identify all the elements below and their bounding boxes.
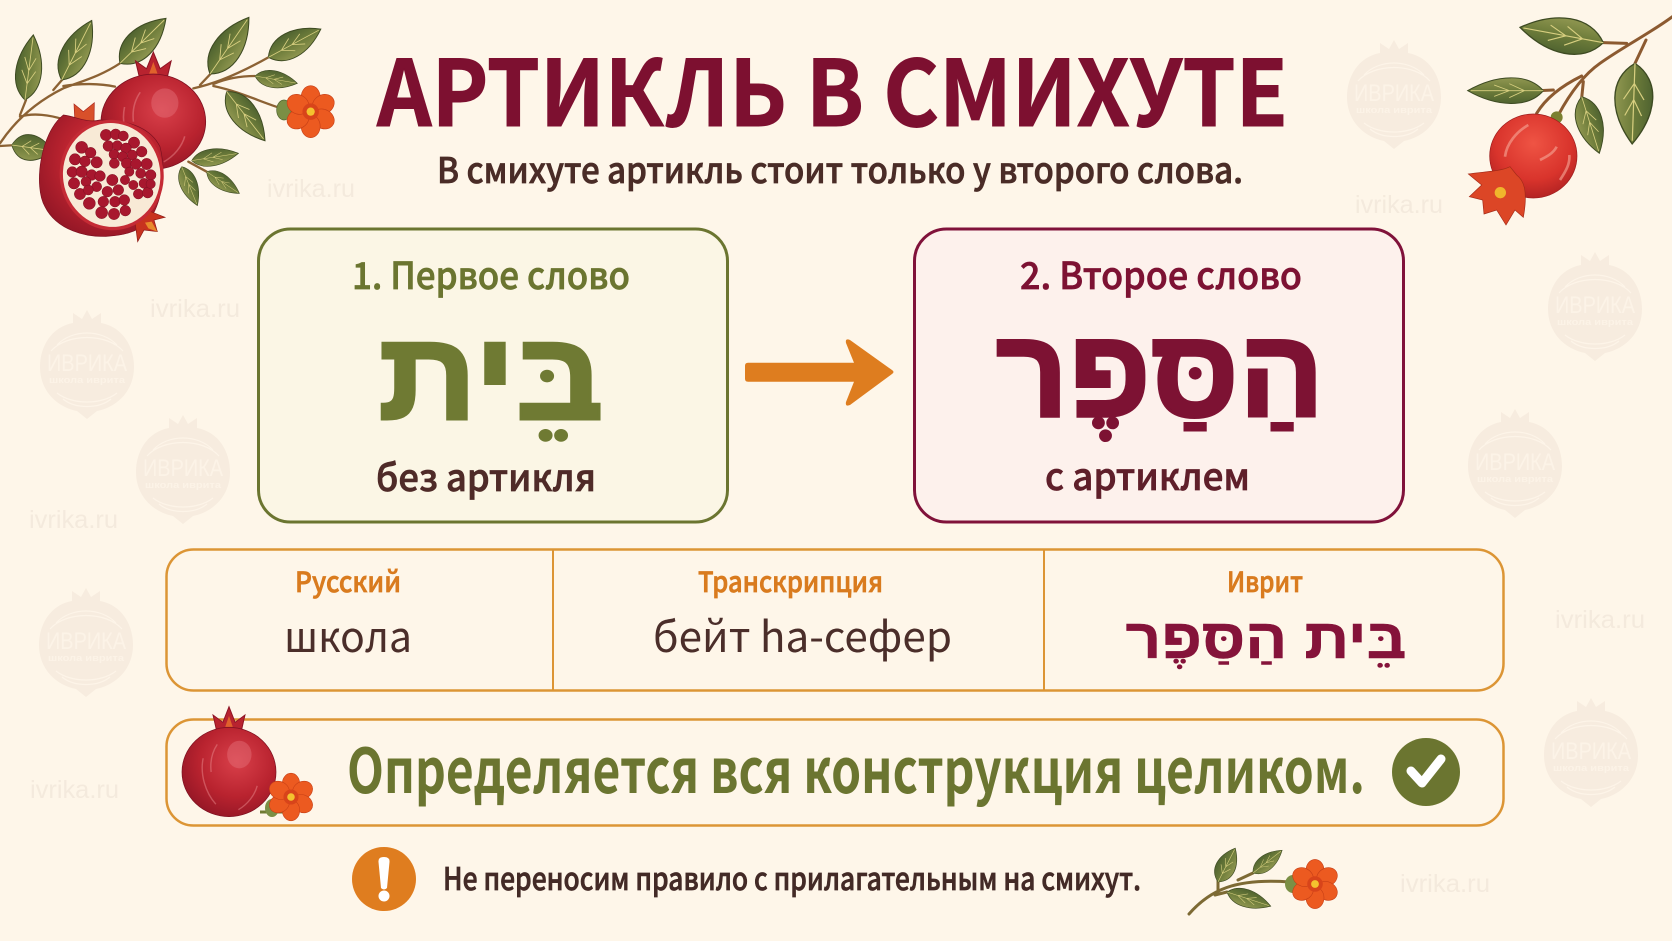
watermark emblem 4: школа иврита — [1356, 105, 1433, 115]
whole pomegranate — [101, 52, 206, 169]
cut pomegranate — [39, 103, 171, 242]
column: Hebrew: Иврит — [1227, 561, 1303, 601]
watermark emblem 2 — [136, 415, 230, 524]
first word heading: 1. Первое слово — [352, 246, 630, 300]
watermarks: ivrika.ru: ivrika.ru — [30, 776, 119, 804]
second word caption: с артиклем — [1045, 447, 1250, 501]
banner pomegranate icon — [182, 707, 316, 821]
warning note: Не переносим правило с прилагательным на смихут. — [443, 854, 1141, 899]
watermark emblem 5 — [1548, 252, 1642, 361]
watermark emblem 6 — [1468, 409, 1562, 518]
watermark emblem 3: школа иврита — [48, 653, 125, 663]
watermark emblem 2: школа иврита — [145, 480, 222, 490]
watermark emblem 1: ИВРИКА — [47, 350, 127, 377]
first word caption: без артикля — [376, 448, 596, 502]
watermarks: ivrika.ru: ivrika.ru — [1400, 870, 1490, 898]
watermark emblem 3 — [39, 588, 133, 697]
watermarks: ivrika.ru: ivrika.ru — [29, 506, 118, 534]
watermark emblem 4 — [1347, 40, 1441, 149]
column: Hebrew — [1126, 561, 1406, 670]
panel: first word — [258, 229, 728, 522]
flower and bud — [277, 86, 338, 138]
watermark emblem 7: школа иврита — [1553, 763, 1630, 773]
watermark emblem 1 — [40, 310, 134, 419]
title: АРТИКЛЬ В СМИХУТЕ — [376, 21, 1288, 153]
Hebrew word: ha-sefer: הַסַּפֶר — [996, 303, 1324, 443]
illustration: pomegranate branch, top left — [0, 8, 338, 242]
second word heading: 2. Второе слово — [1020, 246, 1302, 300]
watermark emblem 1: школа иврита — [49, 375, 126, 385]
watermarks: ivrika.ru: ivrika.ru — [1555, 606, 1645, 634]
column: Russian: школа — [284, 604, 412, 665]
watermarks: ivrika.ru: ivrika.ru — [267, 175, 355, 203]
watermark emblem 5: школа иврита — [1557, 317, 1634, 327]
column: transcription: Транскрипция — [698, 561, 883, 601]
icon: check mark — [1392, 738, 1460, 806]
watermark emblem 4: ИВРИКА — [1354, 80, 1434, 107]
watermarks: ivrika.ru: ivrika.ru — [1355, 191, 1443, 219]
watermark emblem 7: ИВРИКА — [1551, 738, 1631, 765]
Hebrew word: bet: בֵּית — [378, 306, 604, 446]
column: Hebrew: בֵּית הַסַּפֶר — [1126, 607, 1406, 670]
arrow — [745, 339, 894, 406]
watermarks: ivrika.ru: ivrika.ru — [150, 295, 240, 323]
watermark emblem 6: ИВРИКА — [1475, 449, 1555, 476]
watermark emblem 6: школа иврита — [1477, 474, 1554, 484]
column: Russian — [284, 561, 412, 665]
red fruit with open calyx — [1468, 111, 1577, 225]
table: translation — [166, 550, 1504, 690]
column: transcription: бейт hа-сефер — [653, 604, 952, 665]
illustration: pomegranate branch, top right — [1468, 10, 1672, 225]
column: Russian: Русский — [295, 561, 401, 601]
illustration: small flower sprig — [1189, 844, 1341, 914]
watermark emblem 7 — [1544, 698, 1638, 807]
watermark emblem 5: ИВРИКА — [1555, 292, 1635, 319]
watermark emblem 2: ИВРИКА — [143, 455, 223, 482]
watermark emblem 3: ИВРИКА — [46, 628, 126, 655]
column: transcription — [653, 561, 952, 665]
banner text: Определяется вся конструкция целиком. — [347, 721, 1365, 811]
icon: warning — [352, 847, 416, 911]
banner: conclusion — [166, 707, 1504, 826]
watermarks: ivrika.ru — [29, 175, 1645, 898]
subtitle: В смихуте артикль стоит только у второго слова. — [437, 143, 1243, 194]
panel: second word — [914, 229, 1404, 522]
